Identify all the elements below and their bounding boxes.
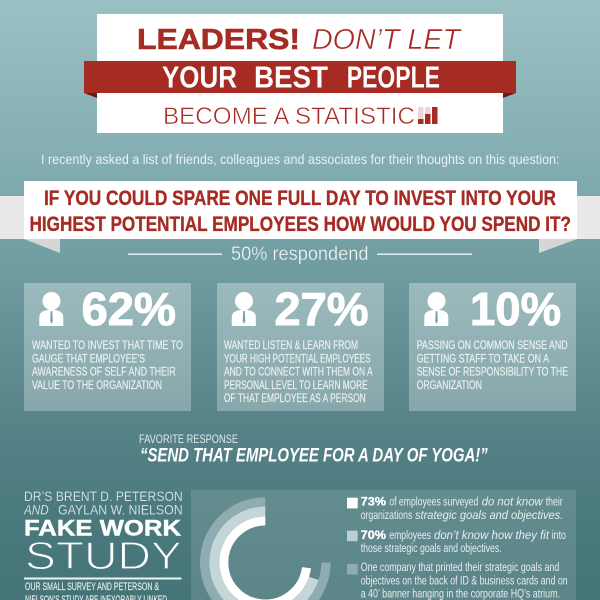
panel: 27% xyxy=(217,283,384,411)
legend item: 73%: of employees surveyed xyxy=(389,495,478,509)
study summary xyxy=(25,581,167,600)
title line: leaders don't let: LEADERS! xyxy=(137,24,300,56)
favorite response: FAVORITE RESPONSE xyxy=(139,432,238,446)
ribbon: YOUR xyxy=(162,60,237,94)
legend item: 70%: 70% xyxy=(361,530,386,542)
fake work study block xyxy=(23,488,183,600)
description xyxy=(417,339,568,392)
respondents line: 50% respondend xyxy=(231,244,368,265)
authors: AND xyxy=(23,501,49,517)
stat: 27%: 27% xyxy=(274,283,368,335)
panel: 10% xyxy=(409,283,576,411)
fake work heading: FAKE WORK xyxy=(24,516,182,541)
authors xyxy=(23,488,183,517)
authors: DR’S BRENT D. PETERSON xyxy=(24,488,183,504)
legend item: 70%: those strategic goals and objectives. xyxy=(361,541,502,555)
description: WANTED LISTEN & LEARN FROM xyxy=(224,339,358,352)
icon: person xyxy=(424,292,448,326)
authors: GAYLAN W. NIELSON xyxy=(58,501,183,517)
description: PERSONAL LEVEL TO LEARN MORE xyxy=(224,379,368,392)
legend item: 73%: organizations xyxy=(361,508,412,522)
banner grey tails xyxy=(0,196,600,253)
title line: become a statistic: BECOME A STATISTIC xyxy=(163,103,415,130)
legend item: company example xyxy=(347,560,568,600)
description: AWARENESS OF SELF AND THEIR xyxy=(32,366,176,379)
description xyxy=(224,339,373,405)
description: GETTING STAFF TO TAKE ON A xyxy=(417,352,549,365)
title line: leaders don't let xyxy=(137,24,462,56)
description xyxy=(32,339,183,392)
banner white panel xyxy=(24,181,577,239)
legend item: 70%: don’t know how they fit xyxy=(434,528,550,542)
legend item: 70% xyxy=(347,528,566,555)
title line: leaders don't let: DON’T LET xyxy=(312,24,462,56)
title white panel xyxy=(97,14,503,133)
legend item: 73%: strategic goals and objectives. xyxy=(415,508,563,522)
description: VALUE TO THE ORGANIZATION xyxy=(32,379,162,392)
description: OF THAT EMPLOYEE AS A PERSON xyxy=(224,392,366,405)
legend item: 73%: their xyxy=(546,495,563,509)
study summary: OUR SMALL SURVEY AND PETERSON & xyxy=(25,581,160,593)
legend item: 70%: employees xyxy=(389,528,431,542)
ribbon xyxy=(84,60,516,98)
favorite response: “SEND THAT EMPLOYEE FOR A DAY OF YOGA!” xyxy=(140,446,488,467)
icon: person xyxy=(39,292,63,326)
description: AND TO CONNECT WITH THEM ON A xyxy=(224,366,373,379)
panel: 62% xyxy=(24,283,191,411)
intro text: I recently asked a list of friends, colleagues and associates for their thoughts on this question: xyxy=(41,152,560,167)
ribbon: BEST xyxy=(254,60,328,94)
stat: 10%: 10% xyxy=(470,283,561,335)
ribbon: PEOPLE xyxy=(347,60,440,94)
description: WANTED TO INVEST THAT TIME TO xyxy=(32,339,183,352)
description: YOUR HIGH POTENTIAL EMPLOYEES xyxy=(224,352,371,365)
donut chart xyxy=(205,502,326,600)
description: ORGANIZATION xyxy=(417,379,482,392)
favorite response xyxy=(139,432,488,467)
legend item: 70%: into xyxy=(552,528,566,542)
title block xyxy=(84,14,516,133)
question banner xyxy=(0,181,600,253)
legend item: 73% xyxy=(347,495,563,522)
legend item: 73%: 73% xyxy=(361,497,386,509)
icon: person xyxy=(232,292,256,326)
panel: statistics xyxy=(191,490,576,600)
description: GAUGE THAT EMPLOYEE’S xyxy=(32,352,145,365)
study heading: STUDY xyxy=(25,535,182,578)
stat: 62%: 62% xyxy=(82,283,176,335)
icon: bar chart xyxy=(418,107,438,124)
question text xyxy=(30,187,571,236)
legend item: 73%: do not know xyxy=(482,495,544,509)
